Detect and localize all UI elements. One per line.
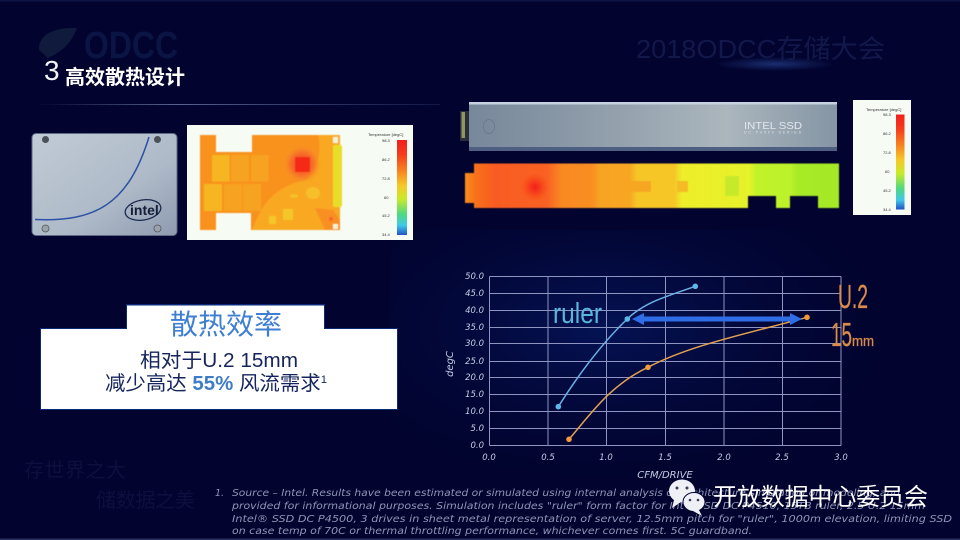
wechat badge (669, 480, 928, 516)
title (44, 55, 185, 89)
colour scale panel: ruler: 72.8 (883, 150, 892, 155)
y axis labels: 50.0 (465, 272, 484, 282)
colour scale: 72.8 (382, 176, 391, 181)
y axis labels: 45.0 (465, 289, 484, 299)
colour scale (368, 132, 407, 237)
series: ruler (556, 284, 698, 410)
colour scale: 86.2 (382, 157, 391, 162)
colour scale panel: ruler: Temperature [degC] (866, 107, 901, 112)
label: U.2 15mm: 15 (831, 316, 852, 353)
colour scale panel: ruler: 34.4 (883, 207, 892, 212)
x axis labels: 3.0 (834, 453, 848, 463)
wechat account name: 开放数据中心委员会 (713, 484, 928, 511)
x axis labels: 1.5 (658, 453, 672, 463)
callout body (105, 349, 327, 395)
axis titles: CFM/DRIVE (637, 470, 693, 481)
logo watermark: ODCC (39, 25, 178, 67)
y axis labels: 0.0 (470, 441, 484, 451)
logo watermark: ODCC: ODCC (84, 25, 178, 67)
x axis labels: 1.0 (599, 453, 613, 463)
footnote (215, 488, 952, 537)
photo: ruler SSD: INTEL SSD (744, 120, 802, 132)
colour scale: 45.2 (382, 213, 391, 218)
callout heading: 散热效率 (170, 309, 282, 340)
watermark: slogans: 存世界之大 (24, 459, 126, 482)
colour scale panel: ruler (853, 100, 911, 215)
photo: ruler SSD: DC P4500 SERIES (744, 130, 802, 134)
colour scale: 34.4 (382, 232, 391, 237)
title: 高效散热设计 (65, 65, 185, 89)
callout body: 相对于U.2 15mm (140, 349, 298, 372)
title: 3 (44, 55, 60, 86)
y axis labels: 40.0 (465, 306, 484, 316)
thermal map: ruler (465, 164, 839, 208)
footnote: on case temp of 70C or thermal throttling performance, whichever comes first. 5C guardband. (232, 526, 752, 537)
footnote: Intel® SSD DC P4500, 3 drives in sheet metal representation of server, 12.5mm pitch for "ruler", 1000m elevation, limiting SSD (232, 514, 952, 525)
callout body: 减少高达 55% 风流需求 (105, 373, 319, 395)
icon: wechat bubbles (669, 480, 705, 516)
y axis labels: 35.0 (465, 323, 484, 333)
x axis labels (482, 453, 848, 463)
colour scale panel: ruler: 98.3 (883, 112, 892, 117)
grid (490, 276, 841, 446)
double arrow (632, 313, 802, 325)
line chart: degC vs CFM/drive (445, 272, 874, 481)
callout: cooling efficiency (40, 304, 398, 410)
watermark: conference title: 2018ODCC存储大会 (636, 34, 885, 64)
y axis labels: 20.0 (465, 373, 484, 383)
swoosh (35, 137, 149, 220)
watermark: slogans: 储数据之美 (96, 489, 195, 512)
thermal map: U.2 (187, 125, 413, 240)
y axis labels: 25.0 (465, 357, 484, 367)
footnote: Source – Intel. Results have been estimated or simulated using internal analysis or architecture simulation or modeling, and (232, 488, 901, 499)
x axis labels: 2.0 (717, 453, 731, 463)
colour scale: 98.3 (382, 138, 391, 143)
line chart: degC vs CFM/drive: degC (445, 351, 456, 377)
label: U.2 15mm: mm (852, 333, 874, 350)
intel logo (124, 197, 162, 223)
footnote: 1. (215, 488, 224, 499)
colour scale: Temperature [degC] (368, 132, 403, 137)
y axis labels: 15.0 (465, 390, 484, 400)
colour scale panel: ruler: 60 (885, 169, 890, 174)
label: ruler: ruler (553, 298, 602, 330)
x axis labels: 2.5 (775, 453, 789, 463)
y axis labels: 30.0 (465, 339, 484, 349)
x axis labels: 0.5 (541, 453, 555, 463)
y axis labels: 5.0 (470, 424, 484, 434)
callout body: 1 (321, 374, 327, 386)
screws (42, 136, 161, 232)
colour scale: 60 (384, 195, 389, 200)
footnote: provided for informational purposes. Simulation includes "ruler" form factor for Intel SSD DC P4510, 15TB ruler, 2.5 U.2 15mm (231, 501, 925, 512)
x axis labels: 0.0 (482, 453, 496, 463)
watermark: slogans (24, 459, 195, 512)
label: U.2 15mm (831, 278, 874, 353)
photo: U.2 SSD (32, 134, 177, 236)
colour scale panel: ruler: 45.2 (883, 188, 892, 193)
label: U.2 15mm: U.2 (838, 278, 868, 315)
photo: ruler SSD (460, 102, 837, 151)
intel logo: intel (130, 202, 159, 218)
colour scale panel: ruler: 86.2 (883, 131, 892, 136)
y axis labels (465, 272, 484, 451)
series: U.2 15mm (566, 314, 810, 442)
y axis labels: 10.0 (465, 407, 484, 417)
